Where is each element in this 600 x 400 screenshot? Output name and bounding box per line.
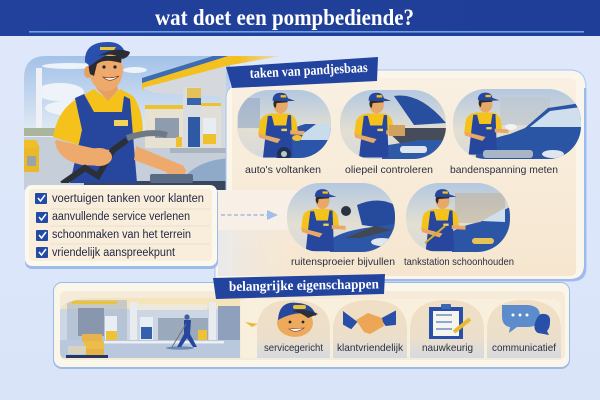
trait: nauwkeurig [410,300,484,358]
item 4: vriendelijk aanspreekpunt [52,247,176,259]
trait: klantvriendelijk [333,300,407,358]
task: bandenspanning meten [450,89,581,176]
icon: smiling face with cap [277,303,318,337]
trait: nauwkeurig: nauwkeurig [422,342,473,354]
task: oliepeil controleren [340,90,446,176]
label: tankstation schoonhouden [404,256,514,268]
fuel nozzle [62,133,167,184]
yellow bin [24,140,40,172]
parked car [187,158,226,181]
illustration: worker sweeping at station [60,298,240,358]
item 1: voertuigen tanken voor klanten [52,193,204,205]
icon: clipboard and pencil [429,304,470,339]
panel: main tasks [215,70,586,281]
road [170,148,230,153]
trait: klantvriendelijk: klantvriendelijk [337,342,404,354]
trait: servicegericht [257,300,330,358]
icon: handshake [344,312,395,334]
trait: servicegericht: servicegericht [264,342,323,354]
banner: belangrijke eigenschappen: belangrijke eigenschappen [229,277,379,295]
banner: belangrijke eigenschappen [213,274,385,299]
banner: taken van pandjesbaas [226,57,378,88]
pump device [150,174,193,183]
banner: taken van pandjesbaas: taken van pandjesbaas [249,61,369,82]
header bar [0,0,600,36]
worker with fuel nozzle [53,42,193,184]
label: bandenspanning meten [450,164,558,176]
label: auto's voltanken [245,164,321,176]
label: oliepeil controleren [345,164,433,176]
canopy [142,56,280,148]
label: ruitensproeier bijvullen [291,256,395,268]
tower [36,68,42,130]
icon: speech bubbles [502,305,550,335]
task: tankstation schoonhouden [404,183,514,268]
item 3: schoonmaken van het terrein [52,229,191,241]
boxes on pallet [66,334,108,358]
task: ruitensproeier bijvullen [287,183,395,268]
panel: checklist [25,185,218,269]
task: auto's voltanken [237,90,331,176]
arrow: checklist to tasks [221,210,278,220]
trait: communicatief [487,300,561,358]
item 2: aanvullende service verlenen [52,211,190,223]
station building [145,103,221,148]
panel: belangrijke eigenschappen [53,282,570,369]
title: wat doet een pompbediende? [155,5,414,30]
panel: hero illustration [24,56,280,190]
sweeping worker [166,314,197,350]
trait: communicatief: communicatief [492,342,556,354]
